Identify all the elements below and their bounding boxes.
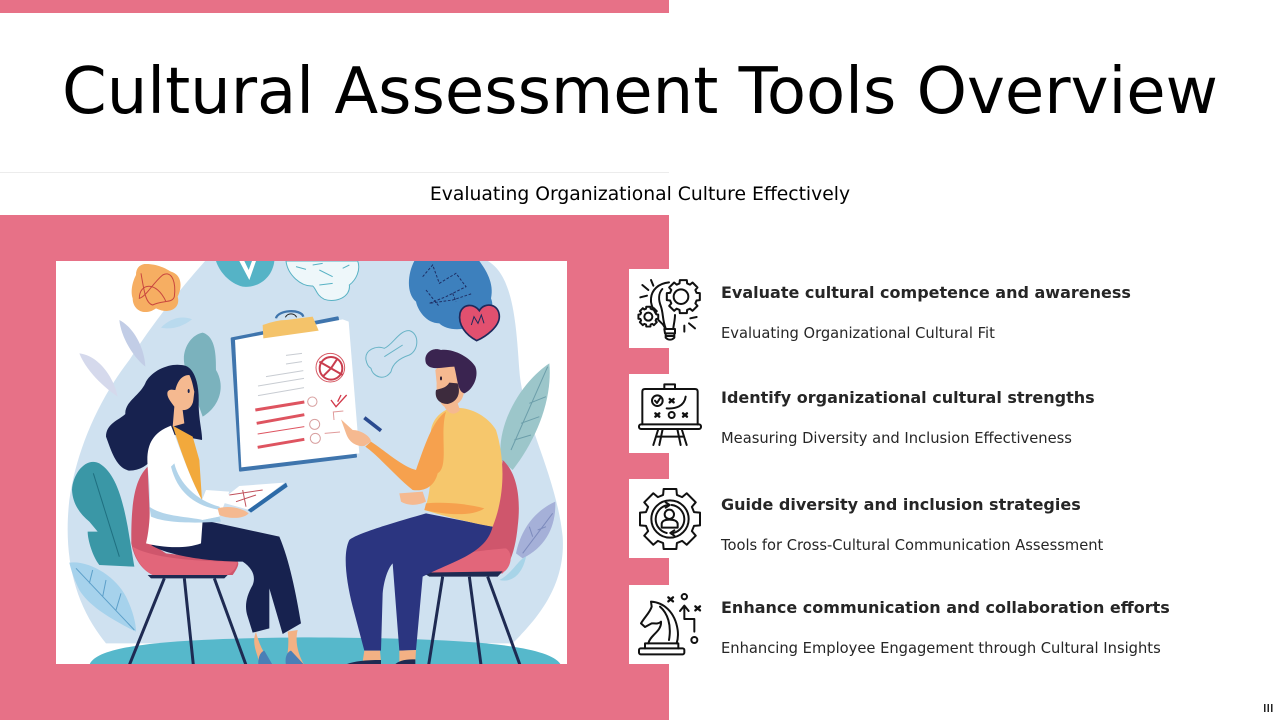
man's chair	[416, 460, 520, 665]
item 2 text: Measuring Diversity and Inclusion Effectiveness	[721, 430, 1072, 447]
woman's chair	[129, 467, 246, 665]
trousers	[346, 513, 493, 651]
head	[435, 364, 465, 414]
background blob	[68, 260, 563, 643]
tablet	[219, 483, 284, 510]
icon tile: strategy board	[629, 374, 709, 453]
illustration: two people discussing a clipboard assessment	[56, 261, 567, 664]
left pink panel	[0, 215, 669, 720]
heart	[460, 305, 499, 341]
subtitle: Evaluating Organizational Culture Effectively	[430, 184, 850, 205]
pen	[364, 418, 381, 431]
item 4 heading: Enhance communication and collaboration efforts	[721, 598, 1170, 617]
title: Cultural Assessment Tools Overview	[62, 55, 1218, 129]
shoes	[363, 650, 416, 662]
pointing hand	[341, 419, 371, 446]
item 3 heading: Guide diversity and inclusion strategies	[721, 495, 1081, 514]
orange blob	[132, 264, 181, 312]
right leaf	[500, 363, 550, 470]
face	[167, 375, 194, 427]
corner mark	[1264, 704, 1273, 712]
icon tile: lightbulb with gears	[629, 269, 709, 348]
bone outline	[366, 331, 417, 377]
legs	[151, 520, 301, 634]
sweater	[424, 408, 502, 527]
left teal leaves	[72, 462, 134, 567]
top accent bar	[0, 0, 669, 13]
divider	[0, 172, 669, 173]
arm	[365, 412, 446, 490]
man	[341, 349, 502, 665]
item 3 text: Tools for Cross-Cultural Communication Assessment	[721, 537, 1103, 554]
left light blue leaf	[69, 562, 136, 632]
decorative leaves	[119, 320, 145, 367]
feet	[254, 630, 304, 665]
blazer	[146, 426, 229, 547]
item 1 heading: Evaluate cultural competence and awareness	[721, 283, 1131, 302]
item 1 text: Evaluating Organizational Cultural Fit	[721, 325, 995, 342]
hair	[106, 365, 202, 471]
item 2 heading: Identify organizational cultural strengths	[721, 388, 1095, 407]
top cloud outline	[286, 261, 359, 300]
hair	[425, 349, 477, 393]
right lavender leaf	[516, 502, 555, 558]
item 4 text: Enhancing Employee Engagement through Cultural Insights	[721, 640, 1161, 657]
top teal shape	[216, 261, 274, 287]
blue brain blob	[409, 261, 492, 329]
floor	[89, 637, 561, 665]
icon tile: chess knight strategy	[629, 585, 709, 664]
icon tile: gear with person	[629, 479, 709, 558]
hand	[218, 507, 249, 518]
clipboard	[232, 317, 356, 471]
woman	[106, 365, 304, 665]
